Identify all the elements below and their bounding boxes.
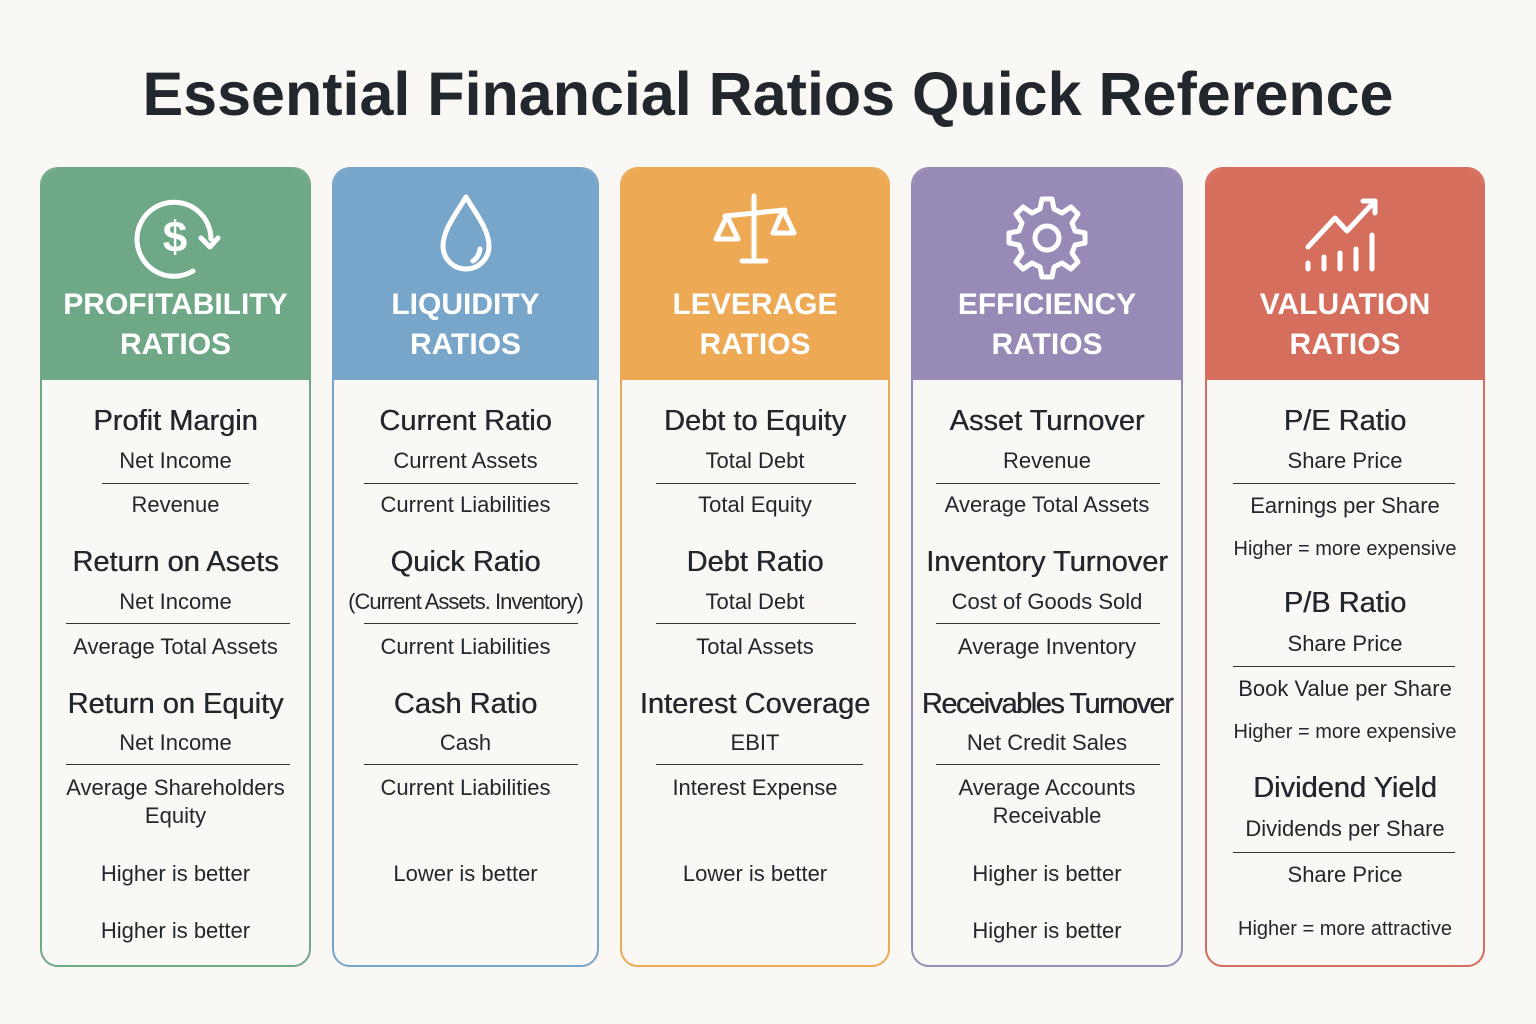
panel: efficiency: Revenue <box>1003 448 1091 473</box>
header: leverage: RATIOS <box>699 328 811 361</box>
panel: profitability: Equity <box>145 803 206 828</box>
panel: efficiency: Average Total Assets <box>945 492 1149 517</box>
panel: liquidity: Current Assets <box>393 448 538 473</box>
header: liquidity <box>334 169 597 380</box>
panel: profitability: Net Income <box>119 730 232 755</box>
title: Essential Financial Ratios Quick Reference <box>142 60 1393 128</box>
panel: liquidity: Cash <box>440 730 491 755</box>
icon: water drop <box>440 194 492 272</box>
panel: valuation: Book Value per Share <box>1238 676 1452 701</box>
icon: dollar cycle <box>134 200 220 279</box>
panel: leverage: Debt Ratio <box>686 546 824 578</box>
panel: leverage: Interest Expense <box>672 775 838 800</box>
panel: leverage: EBIT <box>731 730 779 755</box>
panel: efficiency: Asset Turnover <box>949 405 1145 437</box>
panel: leverage: Interest Coverage <box>640 688 870 720</box>
panel: valuation: Higher = more expensive <box>1234 721 1456 743</box>
header: leverage: LEVERAGE <box>672 288 838 321</box>
header: valuation: RATIOS <box>1289 328 1401 361</box>
panel: leverage: Total Debt <box>705 448 805 473</box>
panel: efficiency: Inventory Turnover <box>926 546 1168 578</box>
panel: efficiency: Receivables Turnover <box>922 688 1172 720</box>
panel: valuation: Share Price <box>1288 631 1402 656</box>
panel: leverage: Total Debt <box>705 589 805 614</box>
panel: efficiency <box>911 167 1183 967</box>
panel: profitability: Return on Asets <box>72 546 279 578</box>
panel: liquidity: Quick Ratio <box>391 546 540 578</box>
header: efficiency: EFFICIENCY <box>958 288 1136 321</box>
panel: efficiency: Average Accounts <box>959 775 1135 800</box>
panel: profitability <box>40 167 311 967</box>
icon: dollar cycle: $ <box>162 213 187 262</box>
header: profitability: PROFITABILITY <box>63 288 288 321</box>
panel: liquidity: (Current Assets. Inventory) <box>348 589 583 614</box>
panel: liquidity: Current Liabilities <box>381 492 550 517</box>
panel: leverage: Total Equity <box>698 492 812 517</box>
header: profitability: RATIOS <box>120 328 231 361</box>
panel: liquidity: Cash Ratio <box>394 688 537 720</box>
icon: growth chart <box>1306 198 1378 272</box>
panel: efficiency: Cost of Goods Sold <box>952 589 1142 614</box>
panel: valuation: Higher = more attractive <box>1238 918 1452 940</box>
panel: valuation: Dividend Yield <box>1253 772 1437 804</box>
panel: profitability: Net Income <box>119 448 232 473</box>
panel: leverage <box>620 167 890 967</box>
panel: liquidity: Current Liabilities <box>381 775 550 800</box>
header: valuation <box>1207 169 1483 380</box>
panel: efficiency: Net Credit Sales <box>967 730 1127 755</box>
panel: efficiency: Average Inventory <box>958 634 1136 659</box>
panel: liquidity: Lower is better <box>393 861 538 886</box>
panel: profitability: Return on Equity <box>67 688 284 720</box>
panel: efficiency: Higher is better <box>972 918 1122 943</box>
panel: liquidity: Current Ratio <box>379 405 552 437</box>
header: efficiency <box>913 169 1181 380</box>
panel: profitability: Profit Margin <box>93 405 258 437</box>
header: leverage <box>622 169 888 380</box>
panel: valuation: Higher = more expensive <box>1234 538 1456 560</box>
panel: leverage: Debt to Equity <box>664 405 846 437</box>
panel: profitability: Revenue <box>131 492 220 517</box>
panel: profitability: Average Shareholders <box>66 775 285 800</box>
panel: valuation: Share Price <box>1288 862 1402 887</box>
panel: leverage: Total Assets <box>696 634 814 659</box>
header: profitability <box>42 169 309 380</box>
panel: valuation: P/B Ratio <box>1284 587 1406 619</box>
panel: leverage: Lower is better <box>683 861 827 886</box>
panel: valuation: P/E Ratio <box>1284 405 1406 437</box>
header: valuation: VALUATION <box>1260 288 1430 321</box>
panel: valuation: Earnings per Share <box>1250 493 1440 518</box>
icon: gear <box>1006 196 1088 280</box>
panel: efficiency: Receivable <box>993 803 1101 828</box>
panel: valuation: Share Price <box>1288 448 1402 473</box>
panel: profitability: Net Income <box>119 589 232 614</box>
panel: liquidity: Current Liabilities <box>381 634 550 659</box>
panel: profitability: Higher is better <box>101 918 250 943</box>
header: liquidity: LIQUIDITY <box>391 288 540 321</box>
panel: valuation: Dividends per Share <box>1245 816 1445 841</box>
panel: liquidity <box>332 167 599 967</box>
header: efficiency: RATIOS <box>991 328 1103 361</box>
icon: balance scale <box>714 194 796 264</box>
panel: valuation <box>1205 167 1485 967</box>
panel: efficiency: Higher is better <box>972 861 1122 886</box>
header: liquidity: RATIOS <box>410 328 521 361</box>
panel: profitability: Higher is better <box>101 861 250 886</box>
panel: profitability: Average Total Assets <box>73 634 278 659</box>
